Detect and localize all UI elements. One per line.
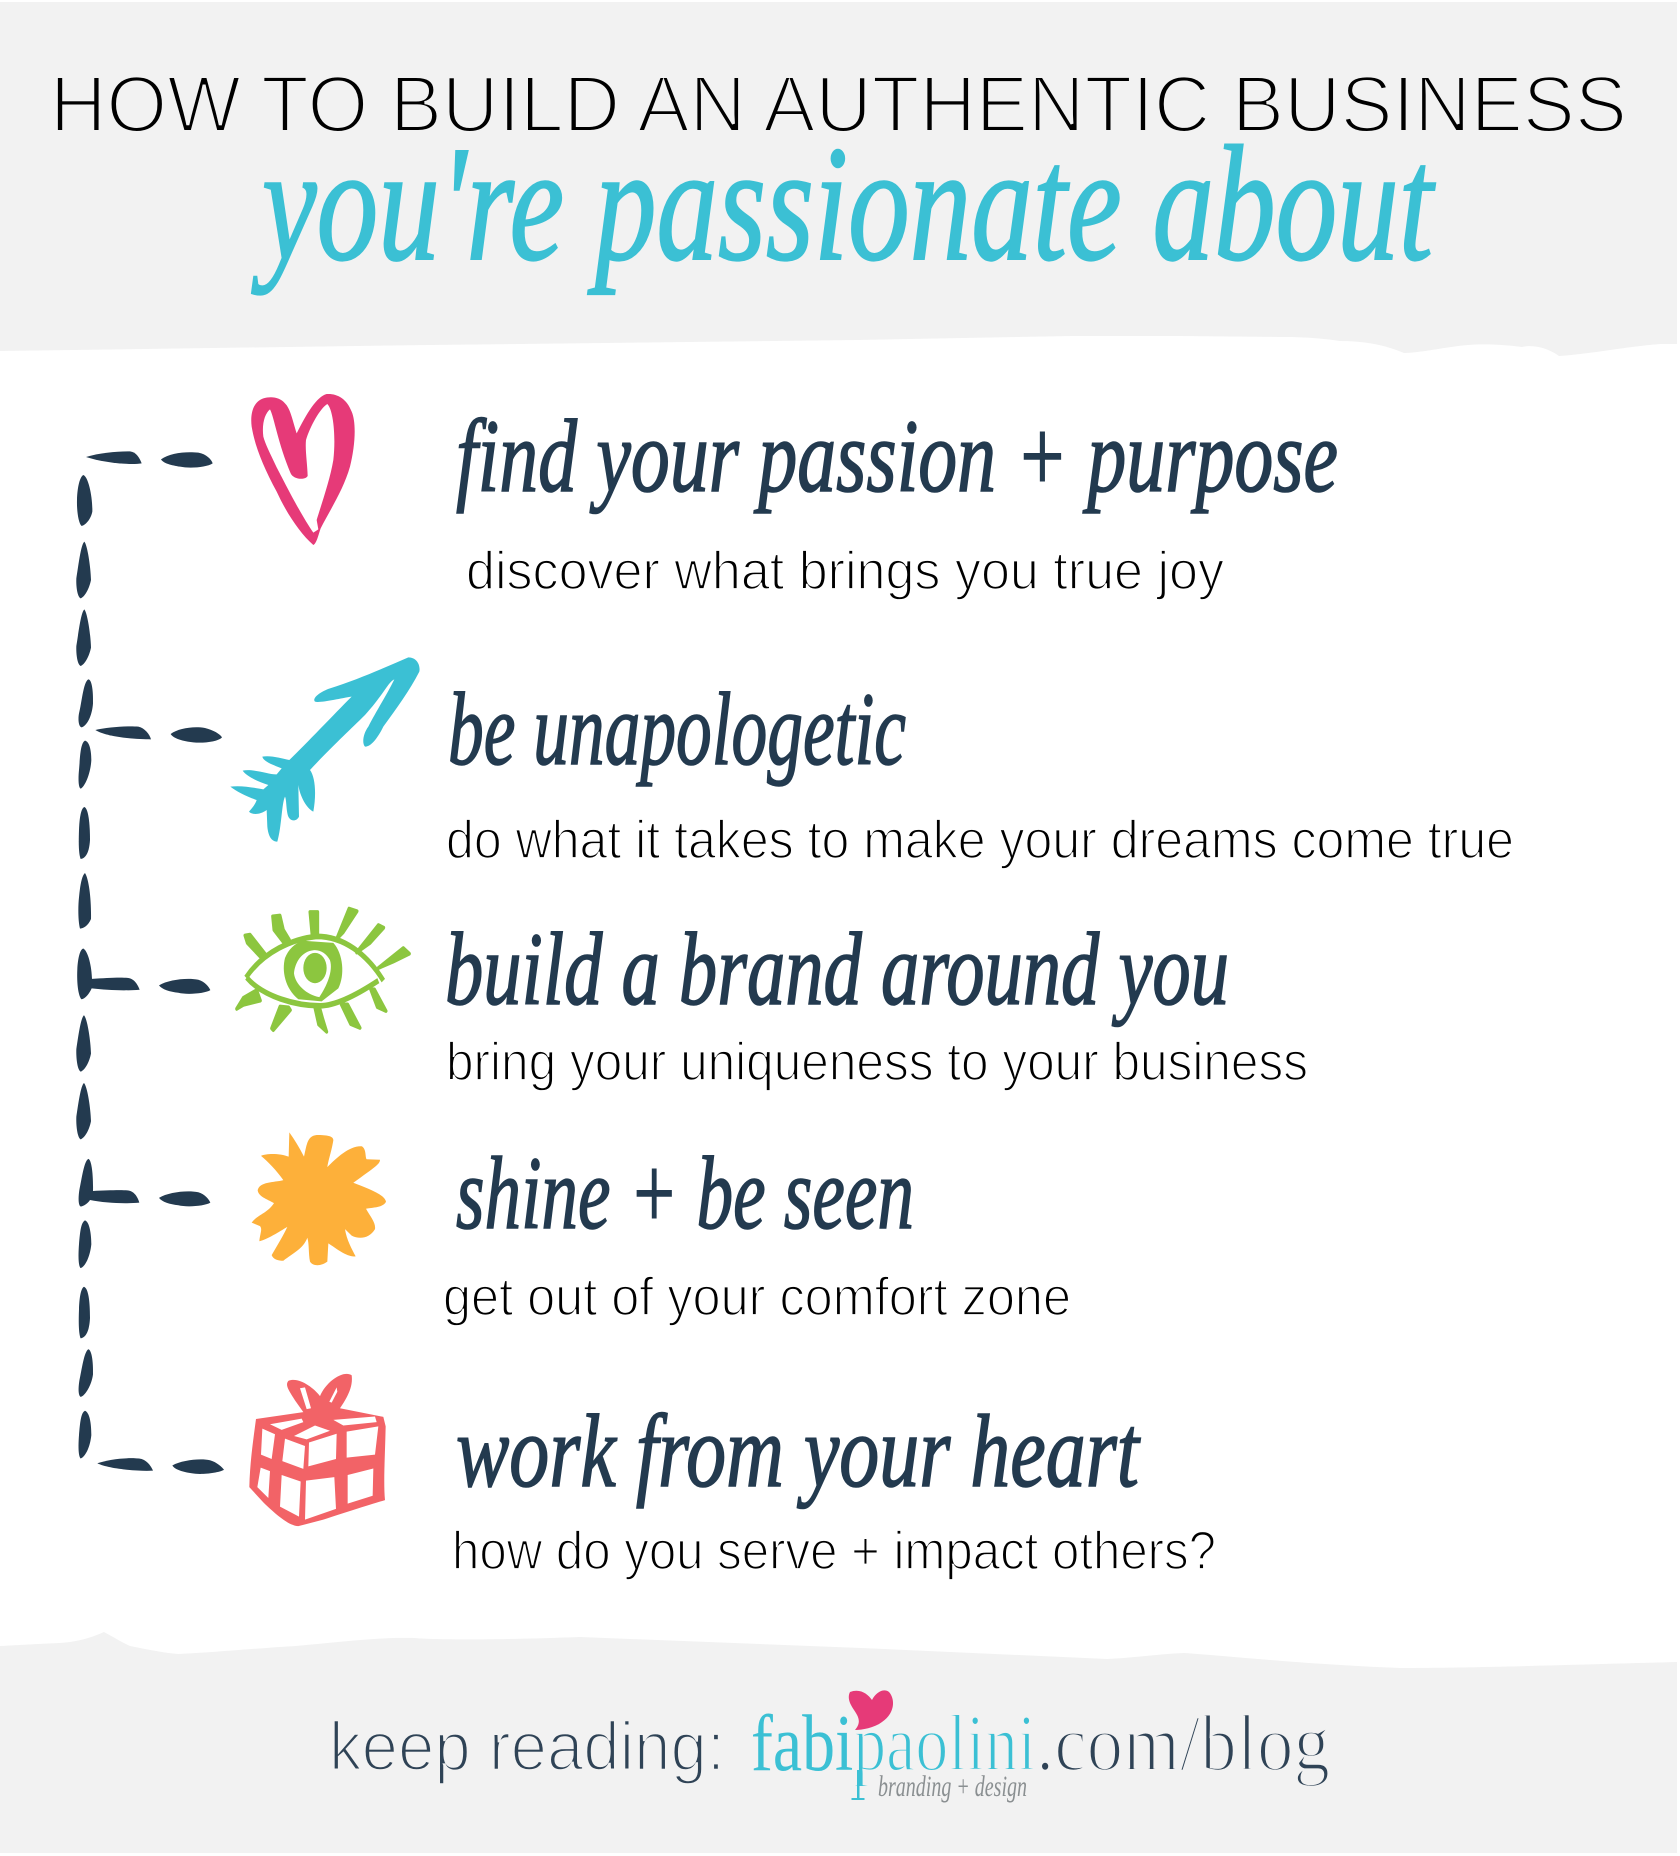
- icon: orange splat: [252, 1132, 386, 1265]
- icon: green eye: [237, 909, 409, 1032]
- step 3 description: bring your uniqueness to your business: [446, 1032, 1308, 1092]
- step 2 heading: be unapologetic: [448, 672, 906, 787]
- footer: logo tagline: branding + design: [878, 1770, 1027, 1803]
- footer: brand name: fabipaolini: [751, 1700, 1036, 1788]
- step 5 description: how do you serve + impact others?: [452, 1521, 1216, 1581]
- footer: keep reading label: keep reading:: [329, 1708, 725, 1785]
- step 2 description: do what it takes to make your dreams come true: [446, 810, 1514, 870]
- panel: footer background: [0, 1632, 1677, 1853]
- step 1 description: discover what brings you true joy: [466, 541, 1224, 601]
- icon: logo heart: [849, 1690, 893, 1730]
- footer: url suffix: .com/blog: [1036, 1700, 1330, 1788]
- step 4 description: get out of your comfort zone: [443, 1267, 1071, 1327]
- panel: header background: [0, 2, 1677, 356]
- step 4 heading: shine + be seen: [456, 1136, 914, 1251]
- icon: teal arrow: [230, 657, 420, 842]
- icon: coral gift box: [249, 1374, 386, 1526]
- icon: pink heart: [251, 394, 355, 545]
- dashed connector line: [76, 451, 224, 1474]
- footer: logo p descender: [852, 1770, 864, 1800]
- step 5 heading: work from your heart: [456, 1394, 1141, 1509]
- title line: HOW TO BUILD AN AUTHENTIC BUSINESS: [50, 60, 1627, 148]
- step 3 heading: build a brand around you: [445, 912, 1229, 1027]
- step 1 heading: find your passion + purpose: [456, 399, 1338, 514]
